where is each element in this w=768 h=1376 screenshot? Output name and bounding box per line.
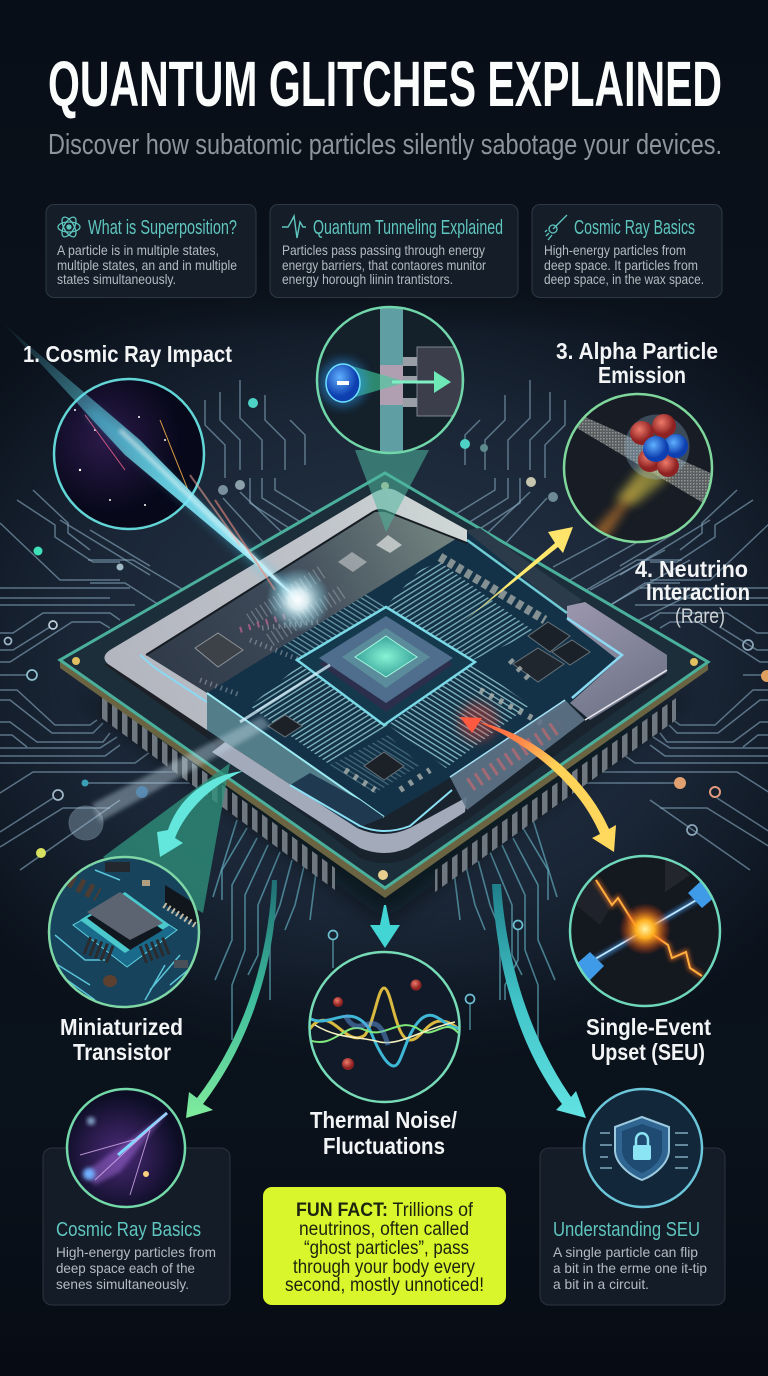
cosmic ray beam: [5, 325, 330, 632]
label: neutrino interaction: 4. Neutrino: [635, 556, 748, 582]
panel: quantum tunneling explained: [270, 204, 518, 298]
translucent glass band lower left: [207, 693, 384, 828]
chip pins: [100, 695, 676, 892]
label: miniaturized transistor: Miniaturized: [60, 1014, 183, 1040]
arrow: teal to transistor: [157, 771, 243, 857]
arrow: green to cosmic ray basics: [186, 880, 277, 1118]
panel: understanding SEU: a bit in the erme one it-tip: [553, 1260, 707, 1276]
arrow: red yellow to SEU: [458, 702, 616, 852]
callout: fun fact: neutrinos, often called: [299, 1219, 469, 1240]
arrow: teal to understanding SEU: [492, 884, 586, 1118]
panel: understanding SEU: [540, 1148, 725, 1305]
panel: what is superposition: multiple states, an and in multiple: [57, 257, 237, 273]
label: alpha particle emission: 3. Alpha Particle: [556, 338, 718, 364]
icon: comet: [545, 215, 567, 240]
frame left section: [104, 489, 467, 738]
circle: miniaturized transistor: [49, 857, 200, 1007]
board surface: [207, 532, 620, 817]
circle: shield security: [584, 1089, 702, 1207]
frame bottom section: [212, 742, 467, 853]
panel: what is superposition: What is Superposition?: [88, 217, 237, 239]
label: thermal noise: Thermal Noise/: [310, 1107, 457, 1133]
panel: what is superposition: [46, 204, 256, 298]
central processor chip: [60, 473, 708, 920]
panel: quantum tunneling explained: Particles pass passing through energy: [282, 242, 485, 258]
callout: fun fact: through your body every: [293, 1257, 475, 1278]
callout: fun fact: second, mostly unnoticed!: [285, 1275, 484, 1296]
translucent band lower right: [450, 700, 585, 810]
beam: chip to transistor: [103, 763, 230, 913]
label: thermal noise: Fluctuations: [323, 1133, 445, 1159]
icon: wave: [282, 216, 306, 238]
chip shadow: [70, 690, 700, 920]
panel: cosmic ray basics top: Cosmic Ray Basics: [574, 217, 695, 239]
label: alpha particle emission: [556, 338, 718, 388]
label: single-event upset: Single-Event: [586, 1014, 711, 1040]
label: neutrino interaction: [635, 556, 750, 628]
arrow: center down: [370, 905, 400, 948]
icon: atom: [58, 215, 80, 239]
panel: cosmic ray basics top: deep space, in the wax space.: [544, 271, 704, 287]
panel: cosmic ray basics bottom: [43, 1148, 230, 1305]
frame underside: [104, 520, 667, 863]
callout: fun fact: “ghost particles”, pass: [304, 1238, 469, 1259]
label: neutrino interaction: (Rare): [675, 605, 725, 628]
panel: quantum tunneling explained: Quantum Tunneling Explained: [313, 217, 503, 239]
pcb substrate: [60, 473, 708, 898]
panel: cosmic ray basics top: [532, 204, 722, 298]
circle: cosmic ray space: [67, 1089, 185, 1207]
panel: cosmic ray basics bottom: senes simultaneously.: [56, 1276, 189, 1292]
arrow: yellow to alpha: [462, 527, 573, 623]
label: single-event upset: [586, 1014, 711, 1065]
label: thermal noise: [310, 1107, 457, 1159]
circle: quantum tunneling: [317, 305, 463, 455]
beam: tunnel circle to chip: [355, 450, 429, 532]
panel: understanding SEU: Understanding SEU: [553, 1219, 700, 1241]
panel: understanding SEU: A single particle can flip: [553, 1244, 698, 1260]
panel: what is superposition: states simultaneously.: [57, 271, 176, 287]
board components: [268, 557, 590, 790]
panel: cosmic ray basics top: High-energy particles from: [544, 242, 686, 258]
panel: quantum tunneling explained: energy barriers, that contaores munitor: [282, 257, 486, 273]
callout: fun fact: FUN FACT: Trillions of: [296, 1200, 474, 1221]
glass window upper left: [146, 512, 467, 693]
upper left glass contents: [195, 535, 402, 695]
panel: quantum tunneling explained: energy horough liinin trantistors.: [282, 271, 453, 287]
transparent band upper right: [467, 528, 582, 613]
callout: fun fact: [263, 1187, 506, 1305]
upper right glow edge: [467, 540, 567, 613]
label: cosmic ray impact: 1. Cosmic Ray Impact: [23, 341, 232, 367]
core die: [297, 607, 475, 725]
label: miniaturized transistor: Transistor: [73, 1039, 171, 1065]
circle: single-event upset: [570, 855, 720, 1006]
label: alpha particle emission: Emission: [598, 362, 686, 388]
circle: thermal noise: [309, 952, 460, 1102]
label: miniaturized transistor: [60, 1014, 183, 1065]
circle: cosmic ray impact: [54, 379, 204, 529]
circuit board traces background: [0, 380, 768, 1040]
board traces around core: [250, 562, 535, 795]
panel: cosmic ray basics bottom: deep space each of the: [56, 1260, 195, 1276]
panel: cosmic ray basics top: deep space. It particles from: [544, 257, 698, 273]
panel: cosmic ray basics bottom: High-energy particles from: [56, 1244, 216, 1260]
panel: understanding SEU: a bit in a circuit.: [553, 1276, 649, 1292]
panel: cosmic ray basics bottom: Cosmic Ray Basics: [56, 1219, 201, 1241]
label: single-event upset: Upset (SEU): [591, 1039, 705, 1065]
icon: shield with lock: [615, 1117, 669, 1180]
frame right section: [567, 602, 667, 720]
label: neutrino interaction: Interaction: [646, 579, 750, 605]
circle: alpha particle: [560, 394, 715, 542]
neutrino ghost trail: [69, 665, 330, 840]
panel: what is superposition: A particle is in multiple states,: [57, 242, 219, 258]
